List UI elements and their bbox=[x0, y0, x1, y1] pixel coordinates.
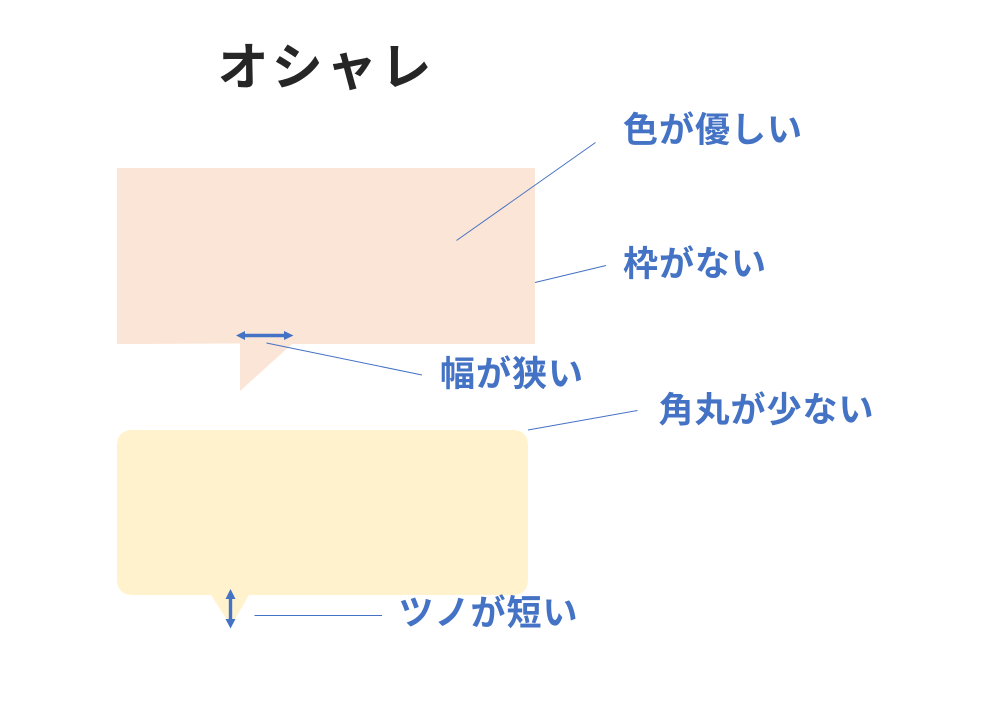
label: soft color bbox=[456, 111, 803, 240]
arrow: width bbox=[236, 331, 294, 340]
label: no border: 枠がない bbox=[623, 245, 767, 284]
title: オシャレ bbox=[218, 39, 435, 96]
arrow: height bbox=[226, 589, 236, 628]
label: narrow width bbox=[266, 343, 584, 394]
label: short horn: ツノが短い bbox=[398, 594, 579, 633]
label: soft color: 色が優しい bbox=[623, 111, 803, 150]
speech bubble: yellow bbox=[117, 430, 528, 626]
label: small corner radius bbox=[528, 391, 875, 430]
label: no border bbox=[535, 245, 767, 284]
speech bubble: peach bbox=[117, 168, 535, 391]
label: narrow width: 幅が狭い bbox=[440, 355, 584, 394]
label: small corner radius: 角丸が少ない bbox=[658, 391, 875, 430]
